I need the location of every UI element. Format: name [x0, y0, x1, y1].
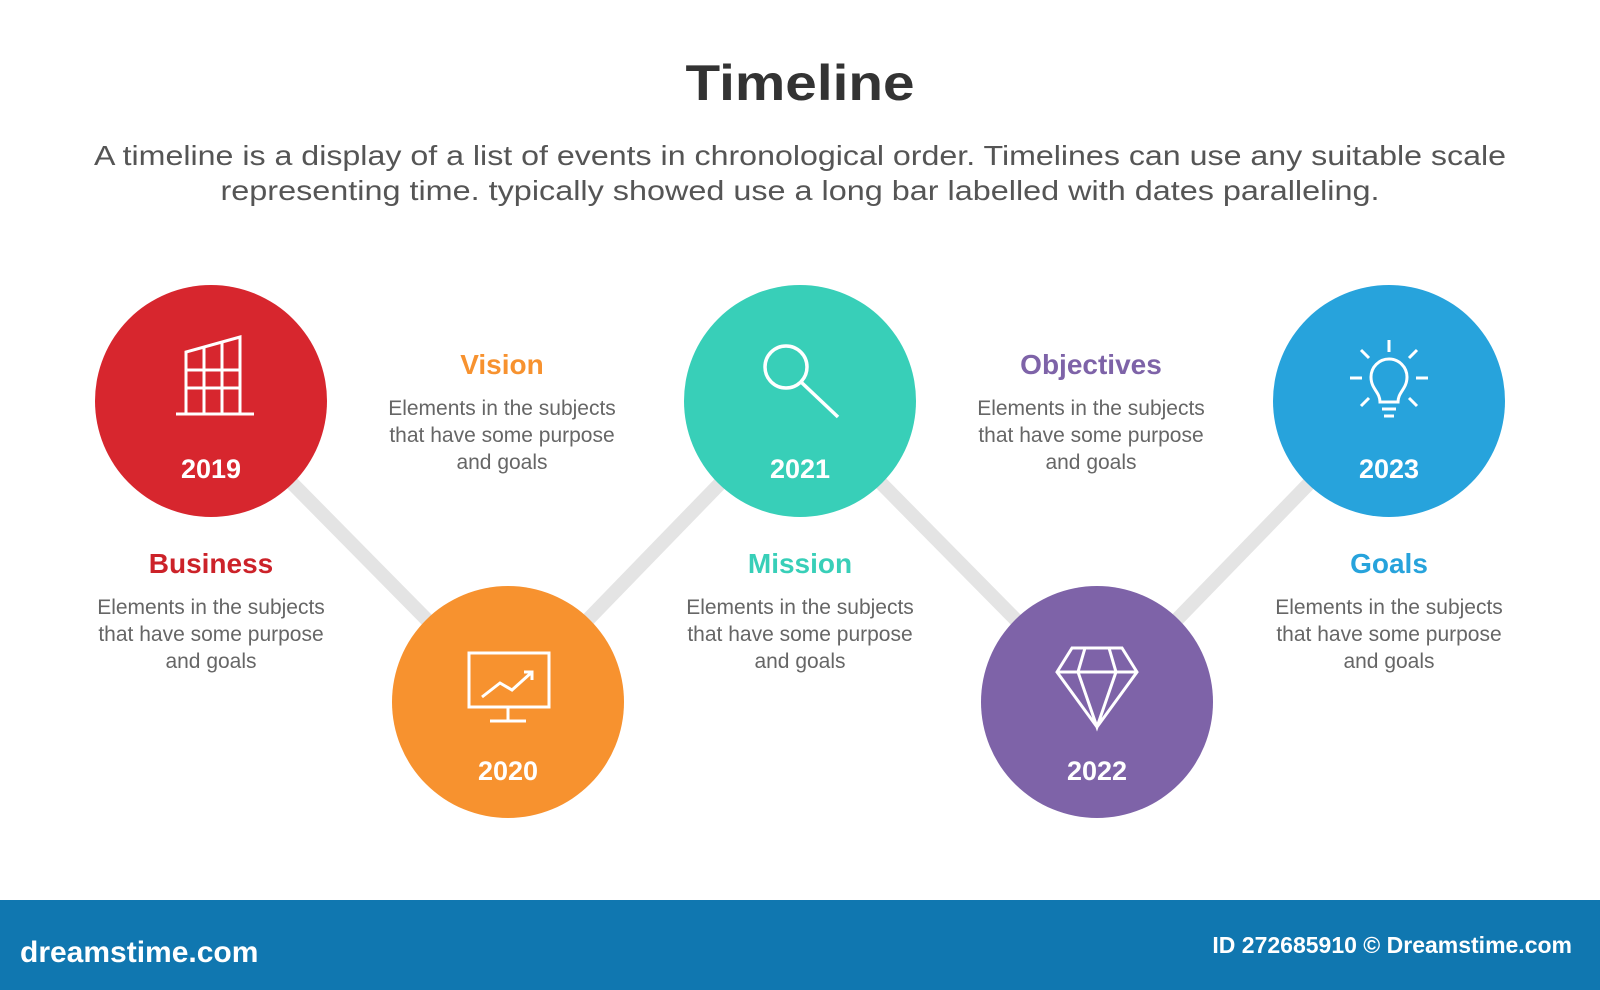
- circle: 2022: 2022: [1067, 756, 1127, 786]
- footer: dreamstime.com: [20, 936, 258, 969]
- circle: 2023: [1273, 285, 1505, 517]
- text: Goals: Goals: [1350, 548, 1428, 579]
- icon: lightbulb: [1350, 340, 1428, 416]
- text: Mission: that have some purpose: [687, 623, 913, 646]
- text: Vision: [388, 349, 616, 474]
- circle: 2019: 2019: [181, 454, 241, 484]
- circle: 2021: [684, 285, 916, 517]
- text: Objectives: and goals: [1045, 451, 1137, 474]
- circle: 2019: [95, 285, 327, 517]
- footer: ID 272685910 © Dreamstime.com: [1212, 932, 1572, 958]
- title: Timeline: [686, 55, 914, 111]
- icon: diamond: [1057, 648, 1137, 727]
- text: Goals: Elements in the subjects: [1275, 596, 1503, 619]
- text: Objectives: that have some purpose: [978, 424, 1204, 447]
- text: Mission: and goals: [754, 650, 846, 673]
- text: Mission: [686, 548, 914, 673]
- text: Business: Elements in the subjects: [97, 596, 325, 619]
- circle: 2022: [981, 586, 1213, 818]
- text: Goals: that have some purpose: [1276, 623, 1502, 646]
- text: Objectives: [977, 349, 1205, 474]
- circle: 2021: 2021: [770, 454, 830, 484]
- subtitle: representing time. typically showed use a long bar labelled with dates paralleling.: [220, 175, 1380, 206]
- text: Vision: and goals: [456, 451, 548, 474]
- text: Goals: [1275, 548, 1503, 673]
- text: Objectives: Elements in the subjects: [977, 397, 1205, 420]
- subtitle: [94, 140, 1506, 206]
- text: Business: Business: [149, 548, 273, 579]
- text: Vision: Elements in the subjects: [388, 397, 616, 420]
- connectors: [211, 401, 1389, 702]
- text: Objectives: Objectives: [1020, 349, 1162, 380]
- text: Mission: Mission: [748, 548, 852, 579]
- text: Vision: that have some purpose: [389, 424, 615, 447]
- circle: 2020: [392, 586, 624, 818]
- icon: building: [176, 337, 254, 414]
- subtitle: A timeline is a display of a list of events in chronological order. Timelines can use any suitable scale: [94, 140, 1506, 171]
- text: Mission: Elements in the subjects: [686, 596, 914, 619]
- circle: 2020: 2020: [478, 756, 538, 786]
- text: Vision: Vision: [460, 349, 544, 380]
- circle: 2023: 2023: [1359, 454, 1419, 484]
- text: Business: [97, 548, 325, 673]
- icon: monitor chart: [469, 653, 549, 721]
- footer: [0, 900, 1600, 990]
- text: Business: that have some purpose: [98, 623, 324, 646]
- text: Goals: and goals: [1343, 650, 1435, 673]
- icon: magnifier: [765, 346, 838, 417]
- text: Business: and goals: [165, 650, 257, 673]
